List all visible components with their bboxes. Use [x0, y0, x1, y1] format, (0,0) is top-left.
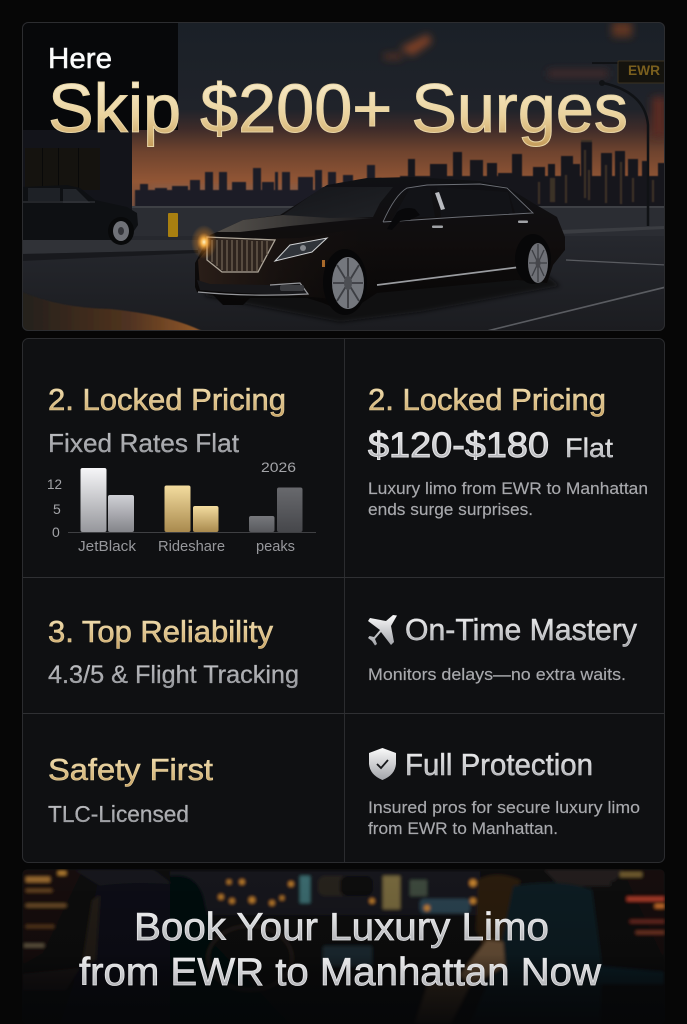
road markings — [487, 287, 666, 331]
dark building — [22, 22, 178, 210]
windshield — [283, 187, 393, 218]
subheading: Fixed Rates Flat — [48, 428, 240, 458]
heading: On-Time Mastery — [405, 613, 638, 647]
waterfront wall — [132, 207, 665, 236]
door panel — [22, 968, 80, 990]
cell: top reliability — [48, 615, 299, 689]
panel: booking call to action — [22, 869, 665, 1024]
dashboard screen — [323, 946, 372, 966]
bar chart: Rideshare — [158, 539, 225, 555]
road sign — [618, 61, 666, 83]
sky at dusk — [132, 22, 665, 206]
orange ground glow — [22, 292, 202, 331]
heading: Full Protection — [405, 748, 593, 782]
window accent — [435, 192, 445, 210]
heading: 2. Locked Pricing — [48, 383, 286, 417]
hero border — [22, 22, 664, 330]
front fender sheen — [198, 239, 302, 296]
mirror — [391, 208, 420, 222]
grille — [207, 237, 275, 272]
car body — [195, 177, 565, 313]
cta heading: from EWR to Manhattan Now — [79, 951, 602, 994]
street lamp — [592, 63, 648, 226]
panel: hero photo with title — [22, 22, 666, 331]
heading: 3. Top Reliability — [48, 615, 274, 649]
subheading: 4.3/5 & Flight Tracking — [48, 661, 299, 689]
bar chart: 0 — [52, 524, 60, 540]
cta heading — [79, 906, 602, 994]
cta heading: Book Your Luxury Limo — [134, 906, 549, 949]
left seat and driver — [84, 874, 294, 974]
cell: safety first — [48, 753, 214, 827]
bar chart: peaks — [256, 539, 295, 555]
cell: locked pricing chart — [47, 383, 316, 555]
skyline lights — [538, 140, 654, 204]
roof lining — [76, 870, 171, 886]
bottom fade — [22, 869, 665, 1024]
bar chart: 2026 — [261, 459, 296, 475]
door handles — [432, 226, 443, 228]
cell: full protection — [368, 748, 640, 838]
cell: locked pricing price: ends surge surprises. — [368, 501, 533, 519]
rear-view mirror — [318, 876, 373, 896]
sidewalk — [22, 240, 200, 254]
right seat and passenger — [415, 875, 664, 1024]
bar chart: 5 — [53, 501, 61, 517]
headlight — [275, 238, 327, 261]
description: Monitors delays—no extra waits. — [368, 666, 626, 684]
subheading: TLC-Licensed — [48, 801, 189, 827]
front bumper — [197, 280, 308, 294]
hero title: Skip $200+ Surges — [48, 70, 628, 147]
price unit: Flat — [565, 433, 614, 463]
hero kicker: Here — [48, 43, 112, 75]
window frame chrome — [383, 184, 533, 222]
road — [22, 236, 665, 331]
icon: shield — [369, 748, 396, 780]
bollard — [168, 213, 178, 237]
background SUV — [22, 185, 138, 245]
windshield view — [170, 871, 480, 915]
heading: Safety First — [48, 753, 214, 787]
bar chart: JetBlack — [78, 539, 137, 555]
city skyline — [135, 140, 665, 210]
cell: locked pricing price — [368, 383, 648, 519]
clouds — [150, 22, 666, 191]
road sign: EWR — [628, 62, 660, 78]
right side window — [620, 869, 665, 962]
panel: feature grid — [22, 338, 664, 862]
amber reflector — [322, 260, 325, 267]
cell: on-time mastery — [368, 613, 638, 684]
front wheel — [323, 249, 367, 315]
bar chart: 12 — [47, 476, 62, 492]
car interior — [22, 869, 665, 1024]
icon: plane — [368, 615, 397, 646]
price: $120-$180 — [368, 425, 549, 465]
limousine — [195, 177, 565, 322]
door trim — [377, 267, 520, 285]
side windows — [393, 187, 528, 218]
headlight glow — [191, 225, 217, 259]
rear wheel — [515, 234, 551, 284]
bar chart — [47, 459, 316, 555]
description: Insured pros for secure luxury limo — [368, 799, 640, 817]
left side window — [22, 869, 82, 950]
road shadow — [205, 270, 560, 322]
description: Luxury limo from EWR to Manhattan — [368, 480, 648, 498]
cell: full protection: from EWR to Manhattan. — [368, 820, 558, 838]
hood highlight — [217, 215, 373, 232]
heading: 2. Locked Pricing — [368, 383, 606, 417]
